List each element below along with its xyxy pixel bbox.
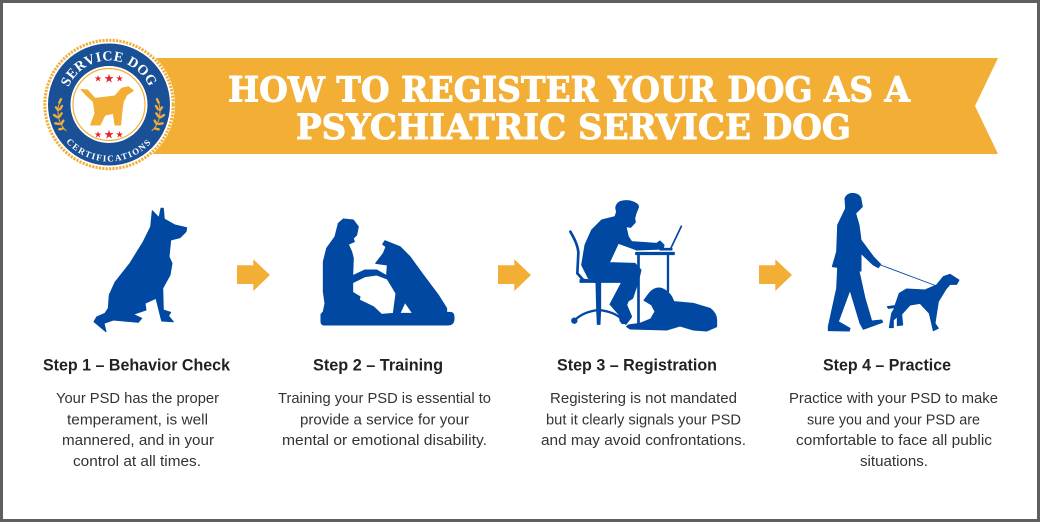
step 2 heading: Step 2 – Training — [313, 356, 443, 374]
badge stars: ★ — [115, 130, 124, 140]
step 3 text — [541, 356, 746, 449]
step 3 heading: Step 3 – Registration — [557, 356, 717, 374]
step 4 description — [789, 391, 998, 470]
step 2 text — [278, 356, 491, 449]
step 3 icon: person at laptop with dog — [570, 201, 717, 331]
badge stars: ★ — [104, 72, 114, 86]
step 1 heading: Step 1 – Behavior Check — [43, 356, 231, 374]
arrow 3 — [759, 259, 792, 291]
step 1 description: mannered, and in your — [62, 433, 214, 449]
step 1 description: Your PSD has the proper — [56, 391, 219, 407]
step 4 description: sure you and your PSD are — [807, 412, 980, 428]
step 3 description: and may avoid confrontations. — [541, 433, 746, 449]
title text: PSYCHIATRIC SERVICE DOG — [296, 107, 851, 148]
badge stars: ★ — [94, 74, 102, 84]
step 1 description: temperament, is well — [67, 412, 208, 428]
arrow 2 — [498, 259, 531, 291]
badge stars: ★ — [94, 130, 102, 140]
badge laurels — [54, 98, 164, 131]
arrow 1 — [237, 259, 270, 291]
title text: HOW TO REGISTER — [228, 70, 599, 110]
step 3 description: but it clearly signals your PSD — [546, 412, 741, 428]
title text — [228, 70, 911, 148]
step 4 heading: Step 4 – Practice — [823, 356, 951, 374]
title banner — [150, 58, 998, 154]
step 1 text — [43, 356, 231, 470]
step 4 text — [789, 356, 998, 470]
step 3 description — [541, 391, 746, 449]
title text: YOUR DOG AS A — [607, 70, 911, 110]
step 4 description: Practice with your PSD to make — [789, 391, 998, 407]
step 1 description: control at all times. — [73, 454, 201, 470]
step 2 description — [278, 391, 491, 449]
badge top text: SERVICE DOG — [61, 51, 156, 86]
step 4 description: situations. — [860, 454, 928, 470]
badge stars: ★ — [115, 74, 124, 84]
step 2 description: provide a service for your — [300, 412, 469, 428]
step 2 description: mental or emotional disability. — [282, 433, 487, 449]
badge stars: ★ — [104, 128, 114, 142]
step 1 icon: sitting dog — [94, 208, 187, 332]
step 2 icon: woman and dog shaking paw — [321, 219, 454, 325]
badge bottom text: CERTIFICATIONS — [67, 139, 150, 162]
badge: Service Dog Certifications — [43, 38, 175, 170]
step 1 description — [56, 391, 219, 470]
step 3 description: Registering is not mandated — [550, 391, 737, 407]
step 2 description: Training your PSD is essential to — [278, 391, 491, 407]
badge stars — [94, 72, 124, 142]
badge dog — [81, 87, 133, 125]
step 4 description: comfortable to face all public — [796, 433, 992, 449]
step 4 icon: man walking dog on leash — [828, 193, 959, 331]
